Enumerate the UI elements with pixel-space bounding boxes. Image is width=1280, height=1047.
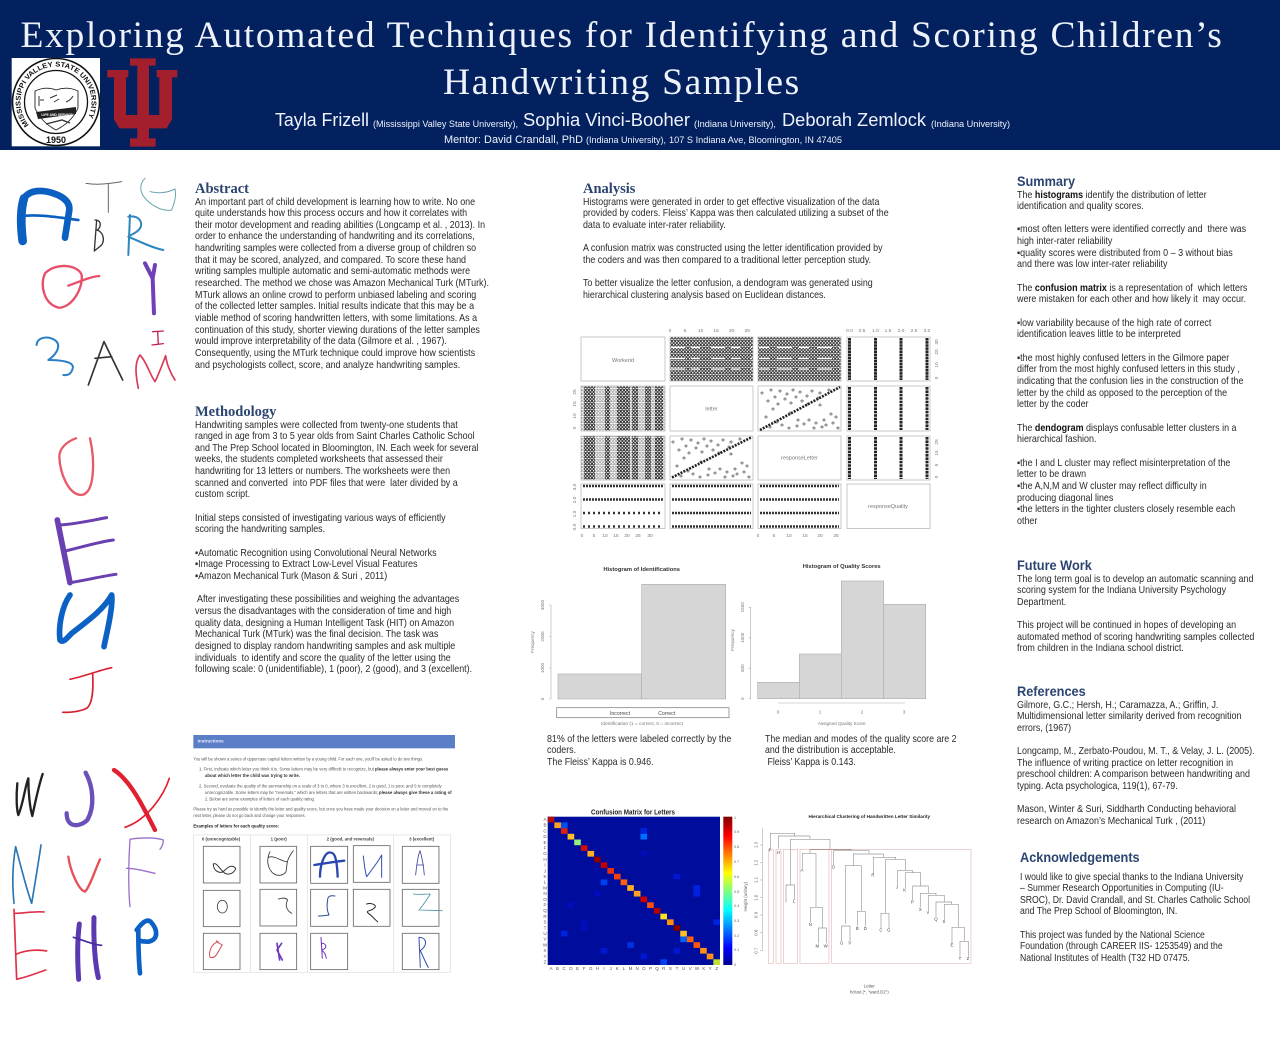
confusion matrix row and column labels: Y xyxy=(543,954,547,959)
confusion matrix row and column labels: Q xyxy=(655,966,659,971)
confusion matrix row and column labels: T xyxy=(544,925,547,930)
instructions text: You will be shown a series of uppercase capital letters written by a young child. For each one, you'll be asked to do two things. xyxy=(193,757,423,762)
instructions header bar: Instructions xyxy=(198,739,224,744)
confusion matrix row and column labels: R xyxy=(662,966,666,971)
quality score examples table: 0 (unrecognizable) xyxy=(202,837,241,842)
heading: acknowledgements: Acknowledgements xyxy=(1020,849,1140,865)
letter T xyxy=(86,182,122,212)
panel: responseLetter vs workerid xyxy=(758,337,841,381)
instructions text: 2. Below are some examples of letters of each quality rating. xyxy=(205,796,315,801)
confusion matrix row and column labels: W xyxy=(695,966,700,971)
scatterplot matrix axis labels: 20 xyxy=(934,349,940,355)
confusion matrix row and column labels: P xyxy=(543,902,547,908)
caption: quality histogram: The median and modes of the quality score are 2 and the distribution is acceptable. Fleiss’ Kappa is 0.143. xyxy=(765,734,957,768)
title: Exploring Automated Techniques for Identifying and Scoring Children’s xyxy=(20,15,1224,56)
caption: identification histogram: 81% of the letters were labeled correctly by the coders. The Fleiss’ Kappa is 0.946. xyxy=(547,734,731,768)
confusion matrix row and column labels: Q xyxy=(543,908,547,913)
dendrogram leaf labels: Q xyxy=(934,916,938,921)
scatterplot matrix axis labels: 15 xyxy=(613,533,619,539)
dendrogram y axis: 1.1 xyxy=(754,876,759,883)
dendrogram leaf labels: B xyxy=(856,926,859,931)
confusion matrix row and column labels: X xyxy=(702,966,705,971)
scatterplot matrix axis labels: 5 xyxy=(773,533,776,539)
histogram of identifications: Correct xyxy=(658,711,676,717)
confusion matrix row and column labels: W xyxy=(543,942,548,947)
confusion matrix row and column labels: M xyxy=(543,885,547,890)
dendrogram leaf labels: V xyxy=(848,941,851,946)
handwritten letters, middle group xyxy=(57,438,116,712)
scatterplot matrix axis labels: 5 xyxy=(593,533,596,539)
confusion matrix colour bar: 1 xyxy=(734,816,736,820)
text block: references: Gilmore, G.C.; Hersh, H.; Caramazza, A.; Griffin, J. Multidimensional letter similarity derived from recognition errors, (1967) Longcamp, M., Zerbato-Poudou, M. T., & Velay, J. L. (2005). The influence of writing practice on letter recognition in preschool children: A comparison between handwriting and typing. Acta psychologica, 119(1), 67-79. Mason, Winter & Suri, Siddharth Conducting behavioral research on Amazon’s Mechanical Turk , (2011) xyxy=(1017,700,1255,827)
histogram of quality scores: 1500 xyxy=(740,602,745,612)
dendrogram leaf labels: M xyxy=(816,943,820,948)
confusion matrix row and column labels: H xyxy=(596,966,599,971)
confusion matrix row and column labels: O xyxy=(642,966,646,971)
confusion matrix row and column labels: K xyxy=(543,874,547,879)
instructions text: next letter, please do not go back and change your responses. xyxy=(193,813,306,818)
scatterplot matrix axis labels: 3.0 xyxy=(572,483,578,490)
confusion matrix colour bar: 0.5 xyxy=(734,890,739,894)
authors line: (Mississippi Valley State University), xyxy=(373,118,518,129)
confusion matrix row and column labels: S xyxy=(543,920,547,925)
quality score examples table: 2 (good, and reversals) xyxy=(327,837,375,842)
confusion matrix row and column labels: O xyxy=(543,897,547,902)
histogram of quality scores: Histogram of Quality Scores xyxy=(803,564,881,570)
letter N xyxy=(13,845,41,903)
dendrogram title: Hierarchical Clustering of Handwritten Letter Similarity xyxy=(808,814,930,820)
scatterplot matrix axis labels: 0 xyxy=(934,475,940,478)
panel: responseLetter vs letter xyxy=(758,386,841,431)
confusion matrix row and column labels: A xyxy=(543,817,547,822)
confusion matrix row and column labels: G xyxy=(589,966,593,971)
confusion matrix xyxy=(543,808,739,971)
panel: responseQuality vs workerid xyxy=(847,337,930,381)
scatterplot matrix axis labels: 25 xyxy=(572,389,578,395)
confusion matrix row and column labels xyxy=(543,817,718,971)
histogram of quality scores xyxy=(730,564,926,726)
histogram of identifications: Frequency xyxy=(530,630,535,653)
panel: responseLetter label: responseLetter xyxy=(781,456,818,462)
scatterplot matrix axis labels: 20 xyxy=(624,533,630,539)
dendrogram leaf labels: Y xyxy=(927,911,930,916)
confusion matrix row and column labels: V xyxy=(543,937,547,942)
histogram of quality scores: 1000 xyxy=(740,632,745,643)
letter X xyxy=(114,770,169,830)
text block: abstract: An important part of child development is learning how to write. No one quite understands how this process occurs and how it correlates with their motor development and reading abilities (Longcamp et al. , 2013). In order to enhance the understanding of handwriting and its correlations, handwriting samples were collected from a diverse group of children so that it may be scored, analyzed, and compared. To score these hand writing samples multiple automatic and semi-automatic methods were researched. The method we chose was Amazon Mechanical Turk (MTurk). MTurk allows an online crowd to perform unbiased labeling and scoring of the collected letter samples. Initial results indicate that this may be a viable method of scoring handwritten letters, with some limitations. As a continuation of this study, shorter viewing durations of the letter samples would improve interpretability of the data (Gilmore et al. , 1967). Consequently, using the MTurk technique could improve how scientists and psychologists collect, score, and analyze handwriting samples. xyxy=(195,196,489,371)
dendrogram leaf labels: I xyxy=(785,898,787,903)
confusion matrix row and column labels: P xyxy=(649,966,652,971)
mentor line: Mentor: David Crandall, PhD xyxy=(444,134,583,146)
letter O, red xyxy=(43,266,99,308)
dendrogram y axis: 1.2 xyxy=(754,859,759,866)
panel: workerid vs letter xyxy=(581,386,665,431)
panel: workerid label xyxy=(581,337,665,381)
histogram of identifications: 2000 xyxy=(540,631,545,642)
confusion matrix row and column labels: L xyxy=(544,880,547,885)
letter V xyxy=(68,857,100,892)
confusion matrix colour bar xyxy=(723,816,739,967)
confusion matrix row and column labels: F xyxy=(544,846,547,850)
logo: Mississippi Valley State University seal xyxy=(12,58,100,146)
scatterplot matrix axis labels: 2.0 xyxy=(898,328,905,334)
authors line: (Indiana University) xyxy=(931,118,1010,129)
confusion matrix row and column labels: J xyxy=(610,966,612,971)
histogram of quality scores: Frequency xyxy=(730,628,735,651)
instructions text: Examples of letters for each quality score: xyxy=(193,823,280,828)
histogram of identifications: Incorrect xyxy=(610,711,631,717)
scatterplot matrix axis labels xyxy=(572,328,940,539)
confusion matrix colour bar: 0.4 xyxy=(734,904,739,908)
dendrogram y axis: 0.7 xyxy=(754,947,759,954)
letter A, blue xyxy=(18,191,78,241)
logo: Mississippi Valley State University seal: 1950 xyxy=(46,135,66,145)
dendrogram leaf labels: N xyxy=(809,922,812,927)
heading: abstract: Abstract xyxy=(195,181,249,197)
dendrogram leaf labels: D xyxy=(864,926,867,931)
panel: responseQuality label xyxy=(847,484,930,528)
logo: Mississippi Valley State University seal: MISSISSIPPI VALLEY STATE UNIVERSITY xyxy=(16,62,96,128)
heading: methodology: Methodology xyxy=(195,404,276,420)
histogram of identifications: Histogram of Identifications xyxy=(603,567,680,573)
letter F xyxy=(127,838,163,907)
letter A, black xyxy=(88,342,123,385)
instructions text: please always give these a rating of xyxy=(379,790,452,795)
scatterplot matrix axis labels: 2.0 xyxy=(572,496,578,503)
instructions header bar xyxy=(193,735,455,748)
scatterplot matrix axis labels: 0 xyxy=(581,533,584,539)
heading: analysis: Analysis xyxy=(583,181,635,197)
panel: letter label: letter xyxy=(705,406,718,412)
confusion matrix colour bar: 0.1 xyxy=(734,948,739,952)
histogram of quality scores: 0 xyxy=(740,697,745,700)
letter I xyxy=(152,331,163,345)
dendrogram leaf labels: S xyxy=(943,919,946,924)
dendrogram leaf labels: C xyxy=(879,928,883,933)
header banner xyxy=(0,0,1280,150)
confusion matrix row and column labels: A xyxy=(549,966,553,971)
instructions text: 2. Second, evaluate the quality of the penmanship on a scale of 3 to 0, where 3 is excellent, 2 is good, 1 is poor, and 0 is completely xyxy=(199,783,442,788)
confusion matrix colour bar: 0.3 xyxy=(734,919,739,923)
scatterplot matrix axis labels: 15 xyxy=(713,328,719,334)
scatterplot matrix axis labels: 1.0 xyxy=(572,510,578,517)
confusion matrix row and column labels: C xyxy=(563,966,567,971)
scatterplot matrix axis labels: 20 xyxy=(817,533,823,539)
confusion matrix row and column labels: G xyxy=(543,851,547,856)
mentor line: 107 S Indiana Ave, Bloomington, IN 47405 xyxy=(669,135,842,146)
title xyxy=(20,15,1224,103)
dendrogram y axis: 0.8 xyxy=(754,929,759,936)
confusion matrix colour bar: 0.2 xyxy=(734,934,739,938)
histogram of quality scores: 1 xyxy=(819,710,822,714)
confusion matrix row and column labels: I xyxy=(544,863,546,868)
confusion matrix row and column labels: B xyxy=(556,966,559,971)
handwritten letters, lower group xyxy=(13,770,169,979)
letter U, red xyxy=(59,438,93,495)
panel: workerid vs responseQuality xyxy=(581,484,665,528)
quality score examples table: 1 (poor) xyxy=(271,837,287,842)
confusion matrix row and column labels: J xyxy=(544,868,546,873)
confusion matrix colour bar: 0.9 xyxy=(734,830,739,834)
dendrogram leaf labels xyxy=(769,848,970,961)
scatterplot matrix axis labels: 10 xyxy=(786,533,792,539)
text block: future work: The long term goal is to develop an automatic scanning and scoring system for the Indiana University Psychology Department. This project will be continued in hopes of developing an automated method of scoring handwriting samples collected from children in the Indiana school district. xyxy=(1017,574,1254,654)
letter E, red xyxy=(14,909,47,979)
dendrogram leaf labels: W xyxy=(824,943,829,948)
text block: analysis: Histograms were generated in order to get effective visualization of the data provided by coders. Fleiss’ Kappa was then calculated utilizing a subset of the data to evaluate inter-rater reliability. A confusion matrix was constructed using the letter identification provided by the coders and was then compared to a traditional letter perception study. To better visualize the letter confusion, a dendogram was generated using hierarchical clustering analysis based on Euclidean distances. xyxy=(583,196,889,301)
panel: letter vs responseLetter xyxy=(670,436,753,480)
histogram of quality scores: 2 xyxy=(861,710,864,714)
authors line: Sophia Vinci-Booher xyxy=(523,110,690,130)
confusion matrix row and column labels: D xyxy=(543,834,547,839)
instructions screenshot xyxy=(193,735,455,972)
confusion matrix title: Confusion Matrix for Letters xyxy=(591,808,675,816)
confusion matrix row and column labels: M xyxy=(629,966,633,971)
scatterplot matrix axis labels: 1.5 xyxy=(885,328,892,334)
panel: workerid label: Workerid xyxy=(612,358,634,364)
histogram of identifications: 0 xyxy=(540,697,545,700)
dendrogram leaf labels: R xyxy=(871,872,875,877)
text block: summary: The histograms identify the distribution of letter identification and quality scores. ▪most often letters were identified correctly and there was high inter-rater reliability ▪quality scores were distributed from 0 – 3 without bias and there was low inter-rater reliability The confusion matrix is a representation of which letters were mistaken for each other and how likely it may occur. ▪low variability because of the high rate of correct identification leaves little to be interpreted ▪the most highly confused letters in the Gilmore paper differ from the most highly confused letters in this study , indicating that the confusion lies in the construction of the letter by the child as opposed to the perception of the letter by the coder The dendogram displays confusable letter clusters in a hierarchical fashion. ▪the I and L cluster may reflect misinterpretation of the letter to be drawn ▪the A,N,M and W cluster may reflect difficulty in producing diagonal lines ▪the letters in the tighter clusters closely resemble each other xyxy=(1017,190,1247,527)
dendrogram leaf labels: E xyxy=(951,943,954,948)
panel: letter vs responseQuality xyxy=(670,484,753,528)
dendrogram leaf labels: H xyxy=(777,850,780,855)
scatterplot matrix xyxy=(572,328,940,539)
scatterplot matrix axis labels: 25 xyxy=(635,533,641,539)
confusion matrix row and column labels: R xyxy=(543,914,547,919)
mentor line: (Indiana University), xyxy=(586,134,666,145)
confusion matrix row and column labels: Y xyxy=(709,966,712,971)
letter R xyxy=(128,215,163,255)
scatterplot matrix axis labels: 15 xyxy=(802,533,808,539)
handwritten letters, upper group xyxy=(18,178,176,388)
instructions text: please always enter your best guess xyxy=(375,767,449,772)
confusion matrix row and column labels: K xyxy=(616,966,620,971)
confusion matrix row and column labels: U xyxy=(682,966,685,971)
dendrogram xyxy=(743,814,971,995)
letter M xyxy=(136,355,175,388)
dendrogram leaf labels: L xyxy=(793,898,796,903)
confusion matrix row and column labels: U xyxy=(543,931,547,936)
instructions text: unrecognizable. Some letters may be "reversals," which are letters that are written backwards; xyxy=(205,790,378,795)
dendrogram y axis: 1.3 xyxy=(754,841,759,848)
scatterplot matrix axis labels: 10 xyxy=(934,362,940,368)
panel: letter label xyxy=(670,386,753,431)
dendrogram y axis: 1.0 xyxy=(754,894,759,901)
scatterplot matrix axis labels: 3.0 xyxy=(924,328,931,334)
scatterplot matrix axis labels: 10 xyxy=(698,328,704,334)
confusion matrix row and column labels: B xyxy=(543,823,547,828)
letter J, purple xyxy=(67,773,92,825)
quality score examples table: 3 (excellent) xyxy=(409,837,435,842)
panel: responseLetter vs responseQuality xyxy=(758,484,841,528)
dendrogram x axis caption: Letter xyxy=(864,984,875,989)
dendrogram cluster boxes xyxy=(768,849,971,963)
histogram of identifications: 1000 xyxy=(540,662,545,673)
dendrogram branches xyxy=(770,833,968,957)
instructions text: 1. First, indicate which letter you think it is. Some letters may be very difficult to recognize, but xyxy=(199,767,375,772)
dendrogram y axis: 0.9 xyxy=(754,911,759,918)
confusion matrix row and column labels: H xyxy=(543,857,547,862)
scatterplot matrix axis labels: 15 xyxy=(572,401,578,407)
dendrogram y axis: Height (unitary) xyxy=(743,881,748,911)
letter J, red xyxy=(63,668,112,712)
confusion matrix row and column labels: E xyxy=(576,966,579,971)
scatterplot matrix axis labels: 1.0 xyxy=(872,328,879,334)
confusion matrix row and column labels: L xyxy=(623,966,626,971)
mentor line xyxy=(444,134,842,146)
panel: workerid vs responseLetter xyxy=(581,436,665,480)
letter B xyxy=(94,220,103,251)
confusion matrix row and column labels: I xyxy=(603,966,605,971)
scatterplot matrix axis labels: 0.0 xyxy=(846,328,853,334)
scatterplot matrix axis labels: 0.0 xyxy=(572,523,578,530)
text block: acknowledgements: I would like to give special thanks to the Indiana University – Summer Research Opportunities in Computing (IU- SROC), Dr. David Crandall, and St. Charles Catholic School and The Prep School of Bloomington, IN. This project was funded by the National Science Foundation (through CAREER IIS- 1253549) and the National Institutes of Health (T32 HD 07475. xyxy=(1020,872,1250,964)
scatterplot matrix axis labels: 15 xyxy=(934,450,940,456)
instructions text: Please try as hard as possible to identify the letter and quality score, but once you have made your decision on a letter and moved on to the xyxy=(193,807,449,812)
dendrogram leaf labels: J xyxy=(896,884,898,889)
dendrogram leaf labels: A xyxy=(801,868,804,873)
confusion matrix colour bar: 0.6 xyxy=(734,875,739,879)
confusion matrix row and column labels: S xyxy=(669,966,672,971)
letter H xyxy=(73,918,102,979)
title: Handwriting Samples xyxy=(443,62,801,103)
reversed letter N, blue xyxy=(60,595,112,647)
letter G xyxy=(141,178,176,210)
scatterplot matrix axis labels: 5 xyxy=(934,463,940,466)
confusion matrix row and column labels: Z xyxy=(544,960,547,964)
dendrogram leaf labels: Z xyxy=(967,956,970,961)
dendrogram leaf labels: X xyxy=(919,907,922,912)
histogram of identifications: Identification (1 = correct, 0 = incorrect xyxy=(601,721,684,727)
confusion matrix row and column labels: E xyxy=(543,840,547,845)
histogram of quality scores: 3 xyxy=(903,710,906,714)
scatterplot matrix axis labels: 10 xyxy=(572,413,578,419)
letter E, purple xyxy=(57,518,116,583)
scatterplot matrix axis labels: 20 xyxy=(729,328,735,334)
quality score examples table xyxy=(193,835,451,972)
dendrogram leaf labels: O xyxy=(832,865,836,870)
confusion matrix row and column labels: Z xyxy=(715,966,718,971)
authors line: (Indiana University), xyxy=(694,118,776,129)
authors line xyxy=(275,110,1010,130)
dendrogram y axis xyxy=(743,828,762,954)
scatterplot matrix axis labels: 10 xyxy=(602,533,608,539)
confusion matrix row and column labels: X xyxy=(543,948,547,953)
confusion matrix row and column labels: T xyxy=(676,966,679,971)
letter W xyxy=(17,774,43,816)
histogram of identifications: 3000 xyxy=(540,599,545,610)
heading: references: References xyxy=(1017,683,1086,699)
panel: responseQuality vs letter xyxy=(847,386,930,431)
letter Y xyxy=(145,263,155,313)
histogram of quality scores: 500 xyxy=(740,664,745,672)
scatterplot matrix axis labels: 25 xyxy=(833,533,839,539)
authors line: Deborah Zemlock xyxy=(782,110,927,130)
reversed letter S xyxy=(37,338,73,375)
dendrogram x axis caption xyxy=(850,984,889,995)
scatterplot matrix axis labels: 30 xyxy=(934,339,940,345)
confusion matrix row and column labels: D xyxy=(569,966,573,971)
scatterplot matrix axis labels: 0 xyxy=(757,533,760,539)
panel: responseLetter label xyxy=(758,436,841,480)
dendrogram leaf labels: K xyxy=(903,888,906,893)
logo: Indiana University trident xyxy=(107,58,177,147)
histogram of identifications xyxy=(530,567,729,727)
scatterplot matrix axis labels: 0.5 xyxy=(859,328,866,334)
instructions text xyxy=(193,757,452,828)
authors line: Tayla Frizell xyxy=(275,110,369,130)
letter P xyxy=(137,921,156,973)
confusion matrix colour bar: 0.7 xyxy=(734,860,739,864)
panel: letter vs workerid xyxy=(670,337,753,381)
dendrogram leaf labels: P xyxy=(911,899,914,904)
histogram of quality scores: Assigned Quality Score xyxy=(818,721,866,726)
dendrogram x axis caption: hclust (*, "ward.D2") xyxy=(850,990,889,995)
heading: future work: Future Work xyxy=(1017,557,1092,573)
dendrogram leaf labels: F xyxy=(769,848,772,853)
scatterplot matrix axis labels: 5 xyxy=(684,328,687,334)
scatterplot matrix axis labels: 25 xyxy=(745,328,750,334)
dendrogram leaf labels: T xyxy=(959,956,962,961)
confusion matrix colour bar: 0.8 xyxy=(734,845,739,849)
confusion matrix row and column labels: C xyxy=(543,828,547,833)
text block: methodology: Handwriting samples were collected from twenty-one students that ranged in age from 3 to 5 year olds from Saint Charles Catholic School and The Prep School located in Bloomington, IN. Each week for several weeks, the students completed worksheets that assessed their handwriting for 13 letters or numbers. The worksheets were then scanned and converted into PDF files that were later divided by a custom script. Initial steps consisted of investigating various ways of efficiently scoring the handwriting samples. ▪Automatic Recognition using Convolutional Neural Networks ▪Image Processing to Extract Low-Level Visual Features ▪Amazon Mechanical Turk (Mason & Suri , 2011) After investigating these possibilities and weighing the advantages versus the disadvantages with the consideration of time and high quality data, designing a Human Intelligent Task (HIT) on Amazon Mechanical Turk (MTurk) was the final decision. The task was designed to display random handwriting samples and ask multiple individuals to identify and score the quality of the letter using the following scale: 0 (unidentifiable), 1 (poor), 2 (good), and 3 (excellent). xyxy=(195,420,478,675)
panel: responseQuality label: responseQuality xyxy=(868,504,908,510)
scatterplot matrix axis labels: 0 xyxy=(669,328,672,334)
histogram of quality scores: 0 xyxy=(777,710,780,714)
scatterplot matrix axis labels: 0 xyxy=(572,426,578,429)
confusion matrix row and column labels: V xyxy=(689,966,693,971)
dendrogram leaf labels: G xyxy=(887,928,891,933)
confusion matrix row and column labels: F xyxy=(583,966,586,971)
confusion matrix row and column labels: N xyxy=(543,891,547,896)
confusion matrix row and column labels: N xyxy=(636,966,639,971)
panel: responseQuality vs responseLetter xyxy=(847,436,930,480)
dendrogram leaf labels: U xyxy=(840,941,843,946)
logo: Mississippi Valley State University seal: LIFE AND SERVICE xyxy=(41,113,73,117)
confusion matrix cells xyxy=(548,817,720,965)
heading: summary: Summary xyxy=(1017,173,1075,189)
scatterplot matrix axis labels: 30 xyxy=(647,533,653,539)
scatterplot matrix axis labels: 2.5 xyxy=(911,328,918,334)
instructions text: about which letter the child was trying to write. xyxy=(205,773,300,778)
scatterplot matrix axis labels: 0 xyxy=(934,376,940,379)
scatterplot matrix axis labels: 25 xyxy=(934,439,940,445)
confusion matrix colour bar: 0 xyxy=(734,963,736,967)
